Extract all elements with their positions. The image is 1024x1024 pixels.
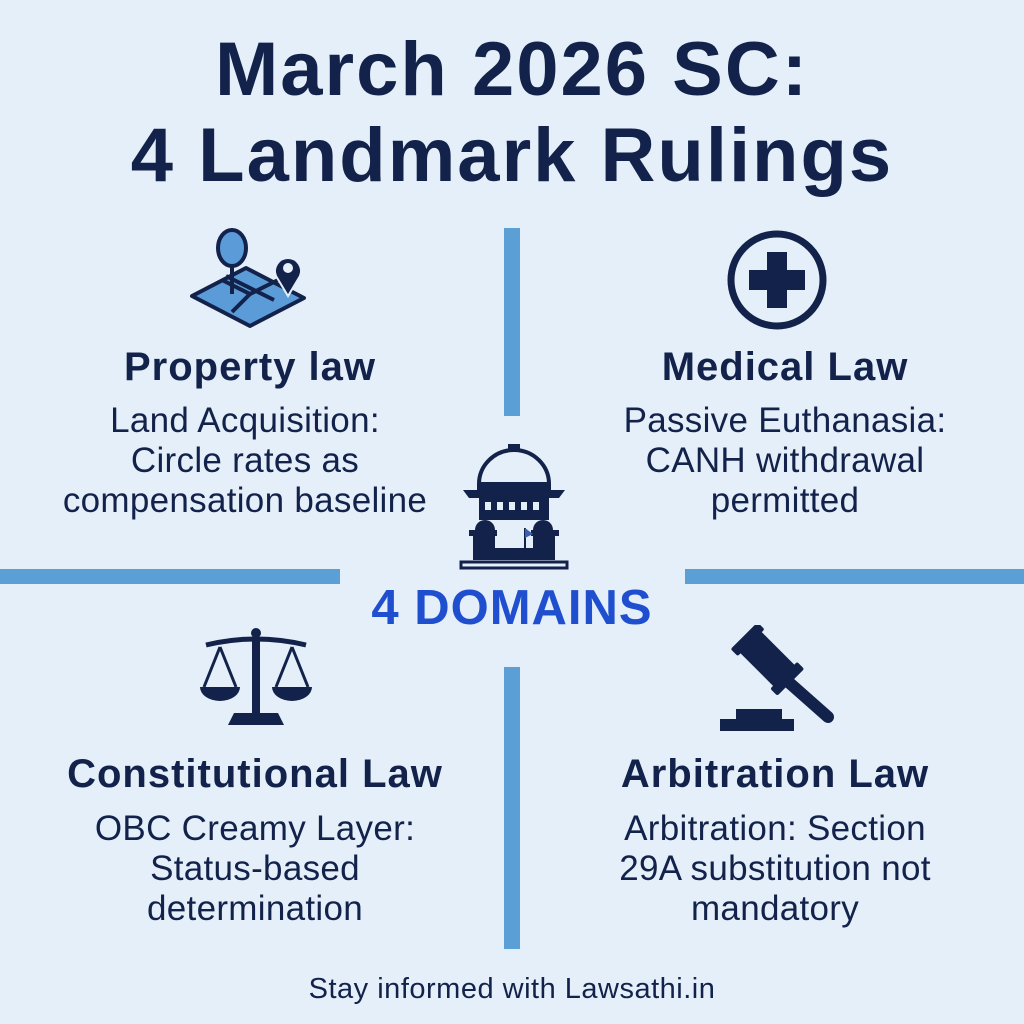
heading: medical law: Medical Law: [662, 345, 908, 389]
icon: supreme court: [460, 444, 568, 570]
text: property: compensation baseline: [63, 481, 427, 520]
footer: Stay informed with Lawsathi.in: [309, 973, 715, 1005]
icon: medical cross: [728, 230, 826, 330]
title: March 2026 SC:: [215, 27, 809, 112]
text: property: Land Acquisition:: [110, 401, 380, 440]
heading: arbitration law: Arbitration Law: [621, 752, 929, 796]
text: arbitration: 29A substitution not: [619, 849, 931, 888]
text: property: Circle rates as: [131, 441, 359, 480]
text: medical: [624, 401, 946, 520]
text: medical: Passive Euthanasia:: [624, 401, 946, 440]
text: constitutional: determination: [147, 889, 363, 928]
text: constitutional: Status-based: [150, 849, 360, 888]
text: medical: CANH withdrawal: [646, 441, 924, 480]
icon: land map: [190, 228, 306, 328]
text: arbitration: Arbitration: Section: [624, 809, 926, 848]
text: arbitration: mandatory: [691, 889, 859, 928]
heading: property law: Property law: [124, 345, 376, 389]
icon: gavel: [720, 625, 834, 731]
text: medical: permitted: [711, 481, 859, 520]
title: 4 Landmark Rulings: [131, 113, 893, 198]
icon: scales: [200, 628, 312, 725]
center label: 4 DOMAINS: [371, 581, 653, 635]
heading: constitutional law: Constitutional Law: [67, 752, 443, 796]
text: constitutional: [95, 809, 415, 928]
title: [131, 27, 893, 198]
text: arbitration: [619, 809, 931, 928]
text: constitutional: OBC Creamy Layer:: [95, 809, 415, 848]
text: property: [63, 401, 427, 520]
